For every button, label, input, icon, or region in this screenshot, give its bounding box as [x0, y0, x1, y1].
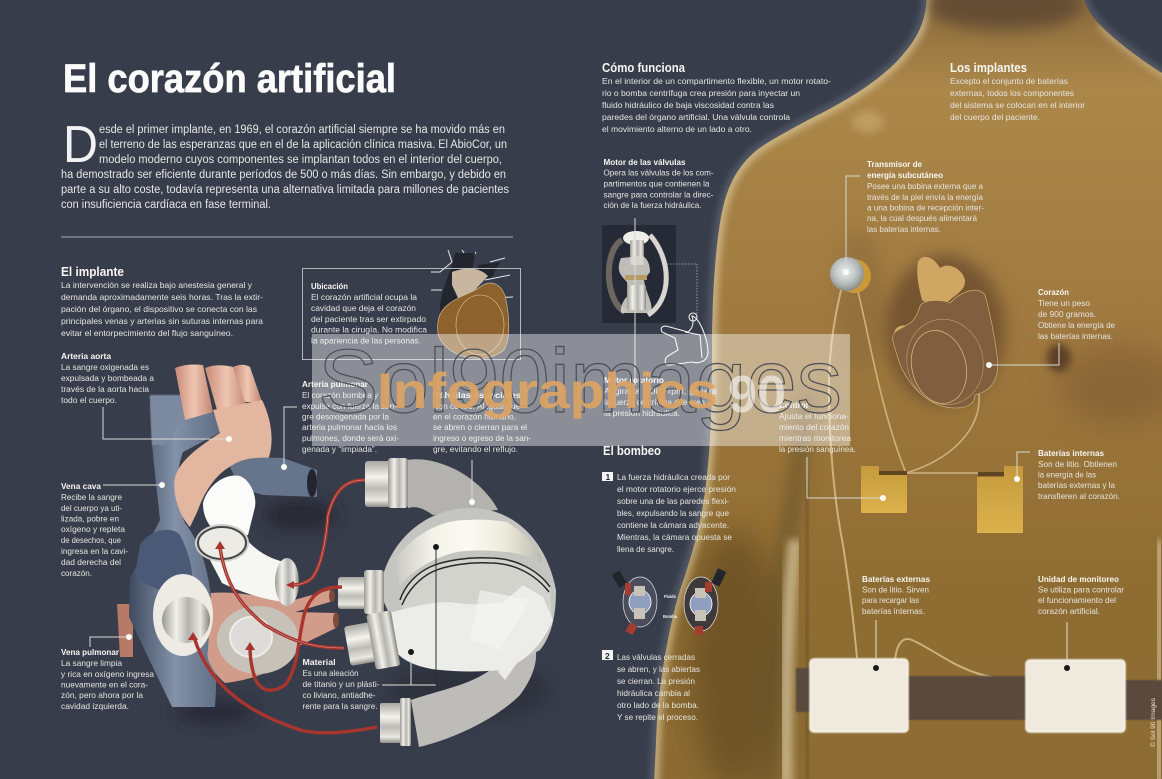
leader lines: dark-dot callouts	[382, 620, 1067, 685]
panel: ubicación: Ubicación	[311, 281, 348, 291]
implant cables	[829, 290, 1027, 681]
text block: material: co liviano, antiadhe-	[302, 690, 376, 700]
text block: cómo funciona: Cómo funciona	[602, 61, 686, 75]
text block: vena pulmonar: La sangre limpia	[61, 658, 122, 668]
text block: arteria pulmonar: expulsa con fuerza la san-	[302, 401, 397, 411]
text block: control: miento del corazón	[779, 422, 849, 432]
text block: transmisor	[867, 159, 984, 234]
panel: ubicación: El corazón artificial ocupa la	[311, 292, 417, 302]
text block: el bombeo: 1	[606, 472, 610, 482]
text block: transmisor: Posee una bobina externa que a	[867, 181, 983, 191]
text block: vena cava: lizada, pobre en	[61, 514, 119, 524]
text block: baterías internas: transfieren al corazón.	[1038, 491, 1120, 501]
text block: baterías externas	[862, 574, 930, 616]
text block: control: la presión sanguínea.	[779, 444, 856, 454]
text block: vena cava: corazón.	[61, 568, 92, 578]
text block: material: Es una aleación	[302, 668, 359, 678]
text block: el bombeo: El bombeo	[603, 444, 661, 458]
text block: material: rente para la sangre.	[302, 701, 378, 711]
text block: arteria aorta: Arteria aorta	[61, 351, 111, 361]
text block: arteria pulmonar: pulmones, donde será oxi-	[302, 433, 399, 443]
text block: motor de las válvulas: sangre para controlar la direc-	[604, 190, 714, 200]
monitoring unit	[1026, 660, 1125, 732]
text block: el bombeo: se cierran. La presión	[617, 676, 695, 686]
text block: el implante: La intervención se realiza bajo anestesia general y	[61, 280, 253, 290]
text block: baterías internas: Son de litio. Obtienen	[1038, 459, 1117, 469]
text block: el bombeo: hidráulica cambia al	[617, 688, 690, 698]
text block: válvulas: Son cuatro. Al igual que	[433, 401, 520, 411]
natural heart anatomy	[117, 364, 339, 724]
text block: cómo funciona: rio o bomba centrífuga crea presión para inyectar un	[602, 88, 800, 98]
text block: material	[302, 657, 380, 711]
text block: transmisor: energía subcutáneo	[867, 170, 943, 180]
text block: arteria aorta	[61, 351, 154, 405]
text block: válvulas: en el corazón humano,	[433, 412, 516, 422]
leader line: titanium shell	[435, 547, 437, 685]
leader lines	[90, 176, 1059, 647]
text block: motor de las válvulas: ción de la fuerza hidráulica.	[604, 200, 702, 210]
text block: control: mientras monitorea	[779, 433, 851, 443]
text block: unidad de monitoreo	[1038, 574, 1124, 616]
text block: el bombeo: Las válvulas cerradas	[617, 652, 695, 662]
panel: ubicación: la apariencia de las personas.	[311, 336, 421, 346]
text block: motor de las válvulas: Motor de las válvulas	[604, 157, 686, 167]
text block: arteria pulmonar: Arteria pulmonar	[302, 379, 369, 389]
text block: corazón: de 900 gramos.	[1038, 309, 1096, 319]
text block: motor rotatorio: Motor rotatorio	[604, 375, 664, 385]
text block: corazón: Corazón	[1038, 287, 1069, 297]
text block: transmisor: Transmisor de	[867, 159, 922, 169]
text block: arteria pulmonar: gre desoxigenada por la	[302, 412, 389, 422]
text block: arteria aorta: expulsada y bombeada a	[61, 373, 154, 383]
text block: los implantes: Excepto el conjunto de baterías	[950, 76, 1068, 86]
text block: el bombeo: se abren, y las abiertas	[617, 664, 700, 674]
text block: arteria pulmonar: El corazón bombea y	[302, 390, 379, 400]
intro text: D	[63, 116, 98, 174]
text block: el bombeo: llena de sangre.	[617, 544, 674, 554]
text block: material: Material	[302, 657, 336, 667]
text block: válvulas: gre, evitando el reflujo.	[433, 444, 518, 454]
text block: el bombeo: Y se repite el proceso.	[617, 712, 698, 722]
watermark: 90	[728, 366, 786, 424]
text block: transmisor: través de la piel envía la energía	[867, 192, 983, 202]
text block: baterías internas: baterías externas y la	[1038, 480, 1115, 490]
figure: patient torso	[654, 0, 1162, 779]
text block: los implantes: Los implantes	[950, 61, 1027, 75]
divider	[61, 236, 513, 238]
text block: vena cava: Recibe la sangre	[61, 492, 122, 502]
text block: vena cava: de desechos, que	[61, 535, 121, 545]
text block: válvulas	[433, 390, 531, 454]
text block: motor rotatorio	[604, 375, 717, 418]
panel: ubicación: del paciente tras ser extirpado	[311, 314, 426, 324]
text block: cómo funciona: En el interior de un compartimento flexible, un motor rotato-	[602, 76, 831, 86]
text block: arteria aorta: La sangre oxigenada es	[61, 362, 149, 372]
text block: vena cava	[61, 481, 128, 578]
text block: el implante: evitar el entorpecimiento del flujo sanguíneo.	[61, 328, 233, 338]
markers: dark dots	[408, 544, 1070, 671]
text block: el bombeo: 2	[605, 651, 610, 661]
icon: internal batteries	[861, 466, 1023, 533]
text block: baterías externas: Baterías externas	[862, 574, 930, 584]
text block: baterías internas	[1038, 448, 1120, 501]
text block: válvulas: Válvulas especiales	[433, 390, 521, 400]
text block: baterías externas: baterías internas.	[862, 606, 925, 616]
text block: el implante: pación del órgano, el dispositivo se conecta con las	[61, 304, 257, 314]
text block: arteria aorta: todo el cuerpo.	[61, 395, 117, 405]
text block: motor rotatorio: la fuerza centrífuga que crea	[604, 397, 705, 407]
intro text	[61, 116, 509, 211]
text block: válvulas: ingreso o egreso de la san-	[433, 433, 531, 443]
device: AbioCor pump	[338, 458, 556, 747]
text block: unidad de monitoreo: el funcionamiento del	[1038, 595, 1116, 605]
text block: corazón: Obtiene la energía de	[1038, 320, 1115, 330]
panel: ubicación	[302, 268, 520, 360]
text block: unidad de monitoreo: corazón artificial.	[1038, 606, 1100, 616]
text block: el bombeo: La fuerza hidráulica creada por	[617, 472, 730, 482]
text block: arteria pulmonar: arteria pulmonar hacia los	[302, 422, 397, 432]
intro text: parte a su alto coste, todavía representa una alternativa limitada para millones de pacientes	[61, 184, 509, 196]
text block: transmisor: na, la cual después alimentará	[867, 213, 977, 223]
text block: corazón	[1038, 287, 1115, 341]
text block: corazón: las baterías internas.	[1038, 331, 1113, 341]
text block: transmisor: a una bobina de recepción inter-	[867, 202, 984, 212]
text block: vena cava: ingresa en la cavi-	[61, 546, 128, 556]
text block: el bombeo: bles, expulsando la sangre que	[617, 508, 729, 518]
text block: vena cava: dad derecha del	[61, 557, 121, 567]
text block: vena pulmonar: nuevamente en el cora-	[61, 680, 148, 690]
icon: rotary motor cutaway	[602, 225, 676, 323]
icon: location heart	[431, 250, 513, 358]
text block: el implante	[61, 265, 263, 338]
text block: unidad de monitoreo: Unidad de monitoreo	[1038, 574, 1119, 584]
title: El corazón artificial	[63, 57, 396, 101]
credit: © Sol 90 Images	[1149, 697, 1157, 747]
text block: motor de las válvulas	[604, 157, 714, 210]
text block: los implantes	[950, 61, 1085, 122]
text block: el implante: El implante	[61, 265, 124, 279]
icon: pumping diagrams: Bomba	[663, 614, 677, 619]
text block: motor de las válvulas: partimentos que contienen la	[604, 178, 710, 188]
text block: el implante: principales venas y arterias sin suturas internas para	[61, 316, 263, 326]
text block: material: de titanio y un plásti-	[302, 679, 380, 689]
text block: vena pulmonar: cavidad izquierda.	[61, 701, 129, 711]
intro text: esde el primer implante, en 1969, el corazón artificial siempre se ha movido más en	[99, 124, 505, 136]
text block: válvulas: se abren o cierran para el	[433, 422, 527, 432]
icon: pump outline	[661, 313, 708, 365]
watermark: Sol90images	[318, 332, 842, 432]
intro text: ha demostrado ser eficiente durante períodos de 500 o más días. Sin embargo, y debido en	[61, 169, 506, 181]
text block: vena pulmonar: zón, pero ahora por la	[61, 690, 143, 700]
text block: motor rotatorio: la presión hidráulica.	[604, 408, 680, 418]
text block: control: Control	[779, 400, 808, 410]
text block: arteria pulmonar: genada y “limpiada”.	[302, 444, 377, 454]
text block: los implantes: del sistema se colocan en el interior	[950, 100, 1085, 110]
text block: unidad de monitoreo: Se utiliza para controlar	[1038, 584, 1124, 594]
text block: vena pulmonar: Vena pulmonar	[61, 647, 120, 657]
text block: cómo funciona: el movimiento alterno de un lado a otro.	[602, 124, 752, 134]
text block: vena cava: del cuerpo ya uti-	[61, 503, 122, 513]
text block: cómo funciona	[602, 61, 831, 134]
icon: energy transmitter	[830, 257, 871, 293]
text block: corazón: Tiene un peso	[1038, 298, 1090, 308]
text block: el bombeo: el motor rotatorio ejerce presión	[617, 484, 736, 494]
text block: los implantes: del cuerpo del paciente.	[950, 112, 1040, 122]
text block: vena pulmonar	[61, 647, 154, 711]
text block: cómo funciona: fluido hidráulico de baja viscosidad contra las	[602, 100, 774, 110]
watermark: Infographics	[377, 363, 718, 419]
text block: vena pulmonar: y rica en oxígeno ingresa	[61, 669, 154, 679]
text block: el bombeo: sobre una de las paredes flexi-	[617, 496, 729, 506]
text block: arteria pulmonar	[302, 379, 399, 454]
text block: vena cava: Vena cava	[61, 481, 101, 491]
markers: white dots	[126, 269, 1020, 640]
panel: ubicación: durante la cirugía. No modifica	[311, 324, 427, 334]
external batteries	[810, 659, 908, 732]
panel: ubicación: cavidad que deja el corazón	[311, 303, 416, 313]
icon: artificial heart on chest	[893, 257, 998, 413]
text block: transmisor: las baterías internas.	[867, 224, 941, 234]
text block: control: Ajusta el funciona-	[779, 411, 849, 421]
icon: pumping diagrams	[612, 568, 726, 635]
icon: arrowheads	[188, 541, 294, 650]
text block: motor de las válvulas: Opera las válvulas de los com-	[604, 168, 714, 178]
text block: motor rotatorio: Al girar a 5 000 rpm, genera	[604, 386, 717, 396]
text block: baterías externas: Son de litio. Sirven	[862, 584, 929, 594]
belt	[796, 668, 1162, 720]
text block: baterías internas: Baterías internas	[1038, 448, 1104, 458]
text block: arteria aorta: través de la aorta hacia	[61, 384, 149, 394]
text block: baterías externas: para recargar las	[862, 595, 919, 605]
arrows: blood flow	[194, 480, 377, 733]
text block: baterías internas: la energía de las	[1038, 470, 1096, 480]
intro text: el terreno de las esperanzas que en el de la aplicación clínica masiva. El AbioCor, un	[99, 139, 507, 151]
text block: el bombeo: contiene la cámara adyacente.	[617, 520, 729, 530]
text block: el bombeo: otro lado de la bomba.	[617, 700, 699, 710]
icon: pumping diagrams: Fluido	[664, 594, 676, 599]
text block: el bombeo: Mientras, la cámara opuesta se	[617, 532, 732, 542]
text block: el bombeo	[602, 444, 736, 722]
intro text: modelo moderno cuyos componentes se implantan todos en el interior del cuerpo,	[99, 154, 502, 166]
text block: control	[779, 400, 856, 454]
text block: los implantes: externas, todos los componentes	[950, 88, 1074, 98]
text block: cómo funciona: paredes del órgano artificial. Una válvula controla	[602, 112, 790, 122]
text block: vena cava: oxígeno y repleta	[61, 524, 125, 534]
text block: el implante: demanda aproximadamente seis horas. Tras la extir-	[61, 292, 263, 302]
intro text: con insuficiencia cardíaca en fase terminal.	[61, 199, 271, 211]
